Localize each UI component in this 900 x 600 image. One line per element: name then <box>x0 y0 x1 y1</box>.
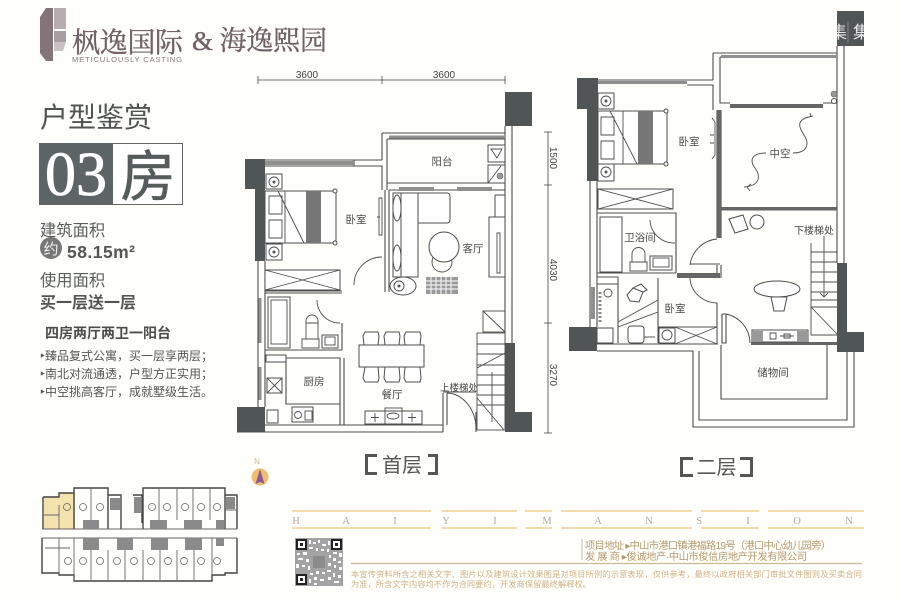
spaced letters: N <box>845 516 853 527</box>
usable area <box>40 272 136 312</box>
feature list: ‣ <box>39 349 46 363</box>
entrance door <box>440 382 478 429</box>
feature list <box>39 348 213 399</box>
second floor plan <box>569 11 870 479</box>
bedroom label: 卧室 <box>346 213 366 226</box>
watermark on column: 集 <box>830 23 847 42</box>
building area: 约 <box>43 241 59 258</box>
void label and arrows: 中空 <box>770 147 790 160</box>
spaced letters: O <box>793 516 801 527</box>
floor label: 首层 <box>382 454 422 477</box>
interior partitions <box>42 488 237 581</box>
lower bedroom furniture <box>597 277 717 344</box>
storage label: 储物间 <box>757 366 789 379</box>
stairs <box>477 311 505 430</box>
stairs label: 下楼梯处 <box>794 224 834 237</box>
lounge fixtures <box>390 277 458 295</box>
unit type badge: 03 <box>45 141 107 209</box>
unit markers <box>64 504 220 564</box>
disclaimer: 本宣传资料所含之相关文字、图片以及建筑设计效果图是对项目所例的示意表现，仅供参考，最终以政府相关部门审批文件图则及买卖合同 <box>351 569 862 579</box>
lounge door arcs <box>690 239 750 343</box>
floor label <box>682 457 752 479</box>
windows <box>591 55 837 319</box>
spaced letters: I <box>493 516 497 527</box>
bedroom bed <box>265 174 337 260</box>
unit type badge: 房 <box>120 146 176 208</box>
icon: north compass <box>252 457 268 486</box>
dining table <box>359 332 424 382</box>
unit info panel <box>39 102 213 399</box>
HAIYI MANSION gold strip <box>292 511 864 528</box>
kitchen label: 厨房 <box>304 375 324 388</box>
spaced letters: S <box>696 516 702 527</box>
spaced letters: N <box>645 516 653 527</box>
vertical dimensions: 3270 <box>547 364 558 387</box>
project address <box>582 539 831 563</box>
project name: & 海逸熙园 <box>192 26 327 56</box>
floor label <box>366 454 436 477</box>
balcony blocks <box>83 497 235 550</box>
layout title: 四房两厅两卫一阳台 <box>45 325 171 341</box>
coffee table <box>429 232 459 272</box>
feature list: 臻品复式公寓，买一层享两层； <box>45 348 213 363</box>
feature list: ‣ <box>39 385 46 399</box>
spaced letters: A <box>594 516 602 527</box>
lower bedroom label: 卧室 <box>664 302 686 315</box>
bathroom <box>268 297 340 348</box>
logo and brand header <box>40 8 327 64</box>
balcony label: 阳台 <box>432 155 452 168</box>
building area: 58.15m² <box>67 242 135 262</box>
storage side unit <box>752 330 808 342</box>
vertical dimensions: 4030 <box>547 259 558 282</box>
watermark on column: 集 <box>853 23 870 42</box>
feature list: 中空挑高客厅，成就墅级生活。 <box>45 384 213 399</box>
project address: 项目地址 ▸中山市港口镇港福路19号（港口中心幼儿园旁） <box>585 539 831 552</box>
disclaimer <box>351 569 862 589</box>
first floor plan <box>237 70 558 477</box>
spaced letters: I <box>746 516 750 527</box>
horizontal dimensions <box>258 70 505 84</box>
icon: north compass: N <box>254 457 260 466</box>
QR code <box>295 538 343 586</box>
walls <box>590 46 854 427</box>
structural columns <box>569 11 864 352</box>
brand tagline: METICULOUSLY CASTING <box>72 55 182 64</box>
building area: 建筑面积 <box>40 222 105 240</box>
icon: brand logo <box>40 8 66 61</box>
balcony fixtures <box>488 145 505 183</box>
building key plan <box>42 488 237 581</box>
bathroom <box>600 217 675 272</box>
spaced letters: H <box>292 516 300 527</box>
spaced letters: I <box>393 516 397 527</box>
divider <box>351 562 862 564</box>
building area <box>40 222 135 262</box>
project address: 发 展 商 ▸俊诚地产·中山市俊信房地产开发有限公司 <box>585 550 807 563</box>
unit type badge <box>39 141 182 209</box>
vent fixture <box>831 91 837 104</box>
spaced letters: Y <box>442 516 450 527</box>
sideboard <box>365 408 422 424</box>
stairs <box>811 236 837 335</box>
living room label: 客厅 <box>462 242 484 255</box>
highlighted unit <box>44 493 75 529</box>
heading: 户型鉴赏 <box>40 102 152 133</box>
balcony windows <box>258 136 505 400</box>
floor label: 二层 <box>696 457 736 479</box>
structural columns <box>237 92 532 432</box>
void label and arrows <box>744 113 813 191</box>
horizontal dimensions: 3600 <box>296 70 319 81</box>
horizontal dimensions: 3600 <box>433 70 456 81</box>
kitchen <box>266 355 313 423</box>
walls <box>237 126 512 432</box>
building outline <box>42 488 237 581</box>
round table <box>754 281 800 311</box>
armchair and side table <box>729 215 764 233</box>
vertical dimensions <box>544 132 558 433</box>
brand name: 枫逸国际 <box>72 27 184 59</box>
wardrobe <box>265 270 340 290</box>
entrance door: 上楼梯处 <box>440 382 478 394</box>
vanity <box>710 118 715 159</box>
watermark on column <box>830 21 870 43</box>
bedroom vanity <box>377 198 382 235</box>
upper bedroom bed <box>598 93 668 181</box>
spaced letters: M <box>542 516 552 527</box>
door swing <box>354 257 382 285</box>
gold rules <box>292 511 864 528</box>
spaced letters <box>292 516 853 527</box>
dining label: 餐厅 <box>382 388 402 401</box>
feature list: 南北对流通透，户型方正实用； <box>45 366 213 381</box>
usable area: 买一层送一层 <box>40 294 136 312</box>
sofa <box>393 193 450 277</box>
TV cabinet <box>489 195 505 277</box>
feature list: ‣ <box>39 367 46 381</box>
spaced letters: A <box>342 516 350 527</box>
usable area: 使用面积 <box>40 272 105 290</box>
vertical dimensions: 1500 <box>547 147 558 170</box>
bedroom label: 卧室 <box>678 135 700 148</box>
bathroom label: 卫浴间 <box>624 231 656 244</box>
disclaimer: 为准，所含文字内容均不作为合同要约，开发商保留最终解释权。 <box>351 579 591 589</box>
dark wall segments <box>677 104 837 345</box>
wardrobe <box>598 189 673 209</box>
